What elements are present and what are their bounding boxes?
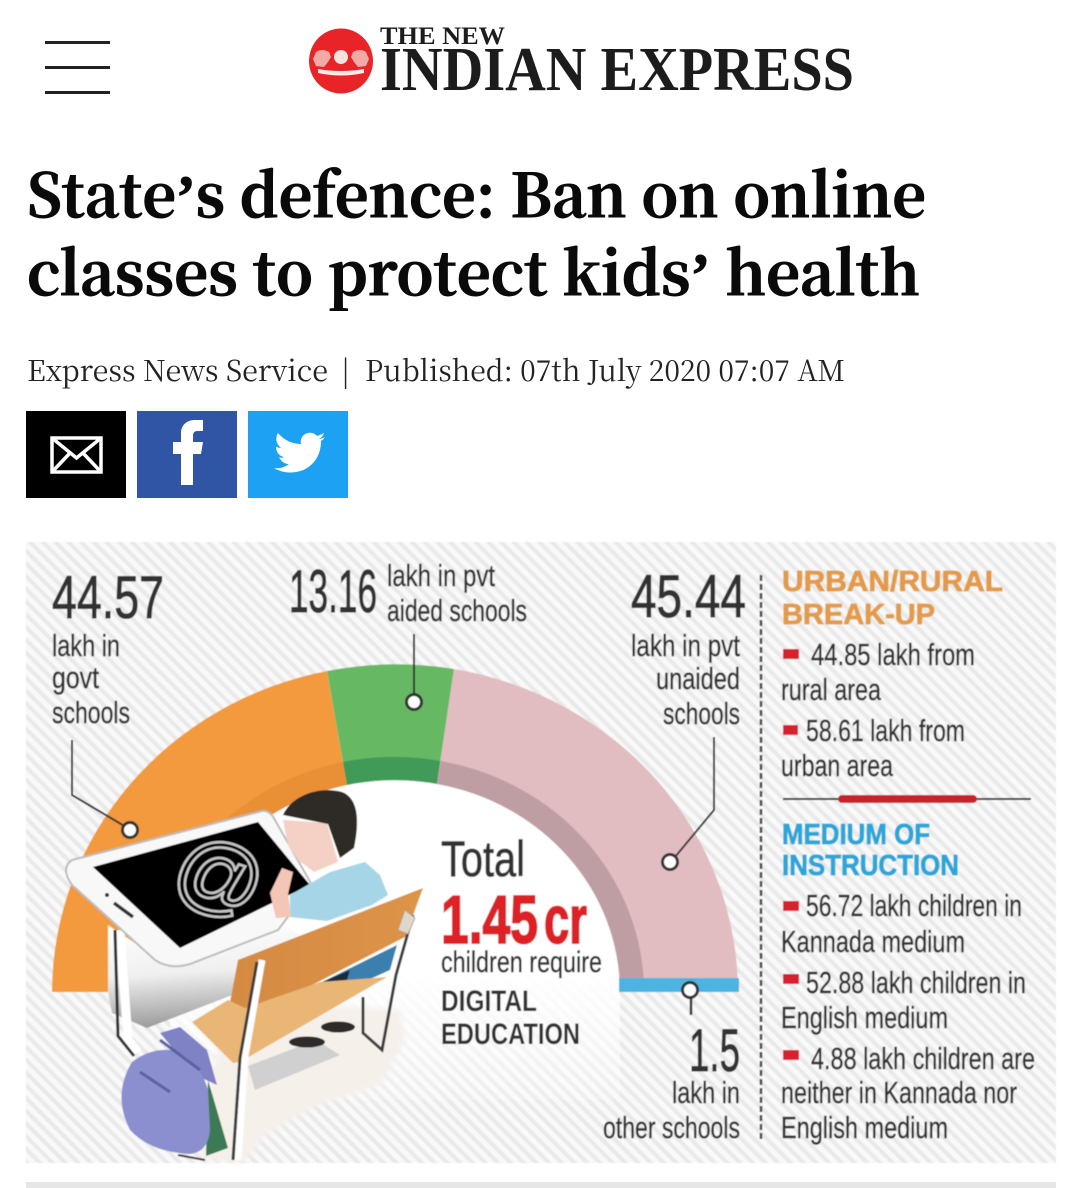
figure: 1.5: lakh in — [672, 1075, 740, 1110]
leader: govt schools — [72, 740, 138, 838]
heading: URBAN/RURAL — [782, 566, 1003, 598]
leader: unaided schools — [662, 737, 714, 870]
heading — [782, 566, 1003, 631]
panel: urban/rural break-up: rural area — [781, 672, 882, 707]
figure: 45.44: 45.44 — [631, 563, 746, 630]
figure: 1.5 — [603, 1017, 740, 1145]
panel: urban/rural break-up: urban area — [781, 748, 894, 783]
segment: pvt unaided schools — [437, 669, 738, 992]
total callout: Total — [441, 831, 525, 887]
floor shadow — [200, 1000, 405, 1162]
school bag — [121, 1027, 228, 1160]
figure: 13.16 — [289, 558, 527, 628]
segment: govt schools — [52, 671, 347, 992]
headline — [27, 149, 926, 313]
masthead logo — [309, 23, 854, 104]
total callout — [441, 831, 602, 1051]
figure: 13.16: lakh in pvt — [387, 558, 495, 593]
heading: INSTRUCTION — [782, 850, 959, 882]
figure: 13.16: 13.16 — [289, 558, 377, 625]
total callout: 1.45 — [441, 882, 538, 958]
semicircle chart — [52, 664, 739, 992]
figure: 1.5: other schools — [603, 1110, 740, 1145]
headline: classes to protect kids’ health — [27, 227, 920, 313]
bench frame — [233, 910, 415, 1160]
under-seat shade — [248, 1040, 340, 1090]
icon: email — [26, 411, 126, 498]
leader: aided schools — [406, 634, 422, 710]
menu icon — [45, 41, 110, 94]
bench backrest — [227, 888, 423, 1018]
bench seat — [192, 977, 387, 1063]
heading: BREAK-UP — [782, 599, 935, 631]
tablet screen — [93, 822, 310, 948]
headline: State’s defence: Ban on online — [27, 149, 926, 235]
desk leg — [115, 930, 138, 1056]
child trousers — [320, 945, 397, 988]
icon: twitter — [248, 411, 348, 498]
segment: pvt aided schools — [327, 664, 454, 785]
icon: facebook — [137, 411, 237, 498]
figure: 45.44 — [631, 563, 746, 731]
byline: Published: 07th July 2020 07:07 AM — [365, 349, 845, 390]
total callout: EDUCATION — [441, 1018, 580, 1051]
byline: Express News Service — [27, 349, 328, 390]
child shirt — [290, 862, 388, 921]
child hair — [283, 790, 357, 858]
shoes — [289, 1022, 355, 1048]
figure: 44.57: govt — [52, 660, 99, 695]
infographic panel — [26, 542, 1056, 1163]
illustration: child at desk with tablet — [66, 790, 423, 1162]
heading — [782, 819, 959, 882]
desk underside — [108, 925, 320, 1028]
tablet body — [66, 811, 312, 966]
panel: medium of instruction: English medium — [781, 1110, 948, 1145]
heading: MEDIUM OF — [782, 819, 930, 851]
panel: urban/rural break-up — [781, 566, 1003, 783]
figure: 45.44: lakh in pvt — [631, 628, 740, 663]
leader: other schools — [682, 982, 698, 1015]
segment: other schools — [619, 978, 739, 992]
figure: 45.44: unaided — [656, 661, 740, 696]
at sign: @ — [162, 814, 277, 936]
panel: medium of instruction: Kannada medium — [781, 924, 965, 959]
arch interior — [170, 780, 620, 1100]
panel: medium of instruction: English medium — [781, 1000, 948, 1035]
total callout: DIGITAL — [441, 985, 537, 1018]
panel: medium of instruction — [781, 819, 1035, 1145]
social buttons — [26, 411, 348, 498]
total callout: cr — [544, 882, 587, 958]
panel: urban/rural break-up: 44.85 lakh from — [811, 637, 975, 672]
child hand — [270, 868, 293, 918]
byline — [27, 349, 845, 390]
figure: 1.5: 1.5 — [689, 1017, 740, 1084]
figure: 44.57: lakh in — [52, 628, 120, 663]
figure: 44.57: 44.57 — [52, 564, 164, 631]
figure: 44.57 — [52, 564, 164, 730]
panel: urban/rural break-up: 58.61 lakh from — [806, 713, 965, 748]
logo small line: THE NEW — [380, 23, 505, 50]
logo emblem — [309, 28, 373, 94]
figure: 45.44: schools — [663, 696, 740, 731]
tablet buttons — [105, 893, 133, 917]
figure: 13.16: aided schools — [387, 593, 527, 628]
figure: 44.57: schools — [52, 695, 130, 730]
total callout: children require — [441, 946, 602, 979]
child face — [283, 820, 338, 872]
byline: | — [341, 349, 350, 390]
logo main line: INDIAN EXPRESS — [380, 36, 854, 104]
